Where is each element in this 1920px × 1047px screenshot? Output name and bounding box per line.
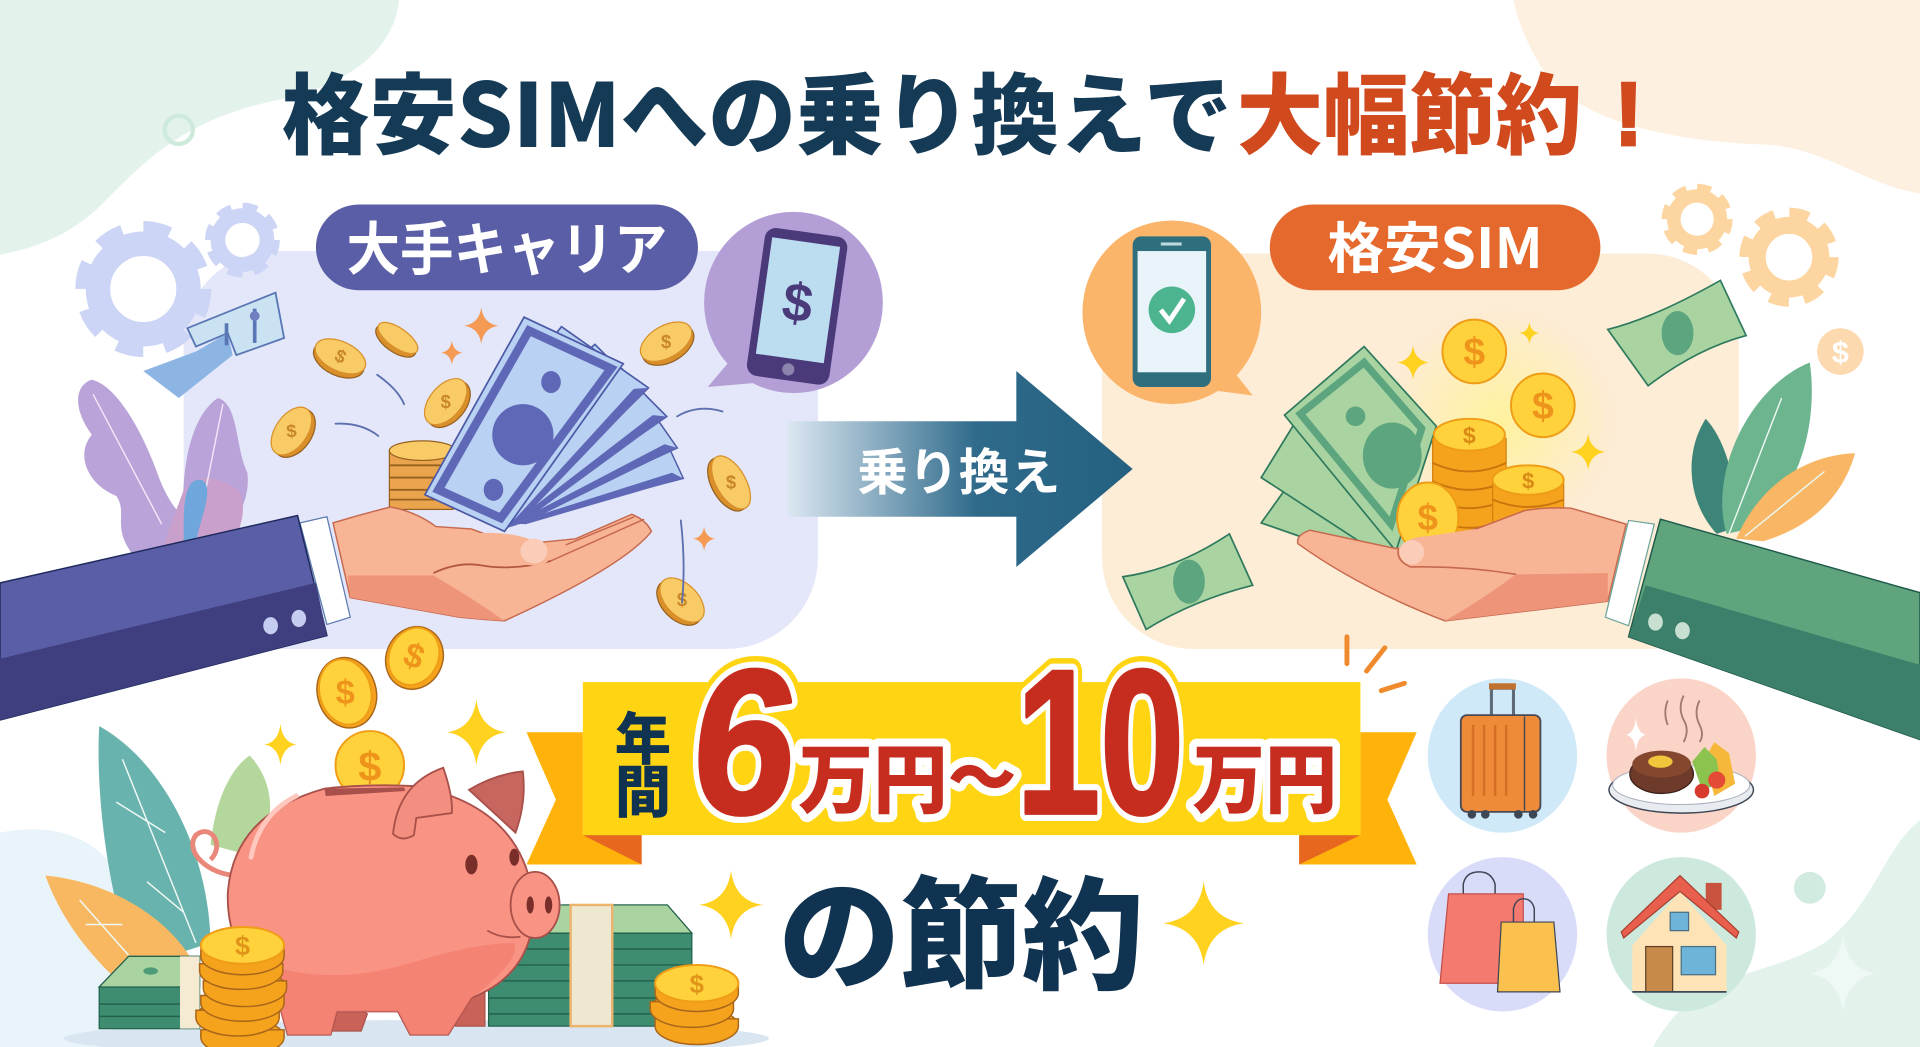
amount outline [684, 626, 1184, 857]
falling coins into piggy bank [309, 617, 453, 735]
far ear [469, 771, 524, 833]
eyes [465, 855, 478, 874]
amount outline: 6 [684, 626, 807, 857]
falling coins left: $ [331, 344, 350, 368]
green bills [1261, 347, 1436, 566]
label pill: major carrier: 大手キャリア [347, 202, 667, 286]
arrow: switch: 乗り換え [857, 433, 1060, 505]
ground shadow [64, 1020, 769, 1047]
icon: house [1607, 857, 1756, 1011]
coin stacks: $ [1418, 497, 1438, 538]
leaves behind piggy [45, 726, 270, 974]
falling coins left: $ [726, 472, 736, 493]
icon: dollar badge right: $ [1832, 335, 1849, 369]
text: per year: 間 [615, 748, 671, 829]
amount text: ～ [948, 722, 1016, 824]
icon: dollar badge right [1817, 328, 1864, 375]
yellow sparkles [1397, 322, 1605, 470]
near ear [393, 768, 452, 839]
panel: budget SIM background [1102, 254, 1739, 649]
budget SIM money [1123, 280, 1746, 629]
icon: gears left [84, 208, 274, 348]
major carrier money [263, 307, 758, 634]
gold coin stack left: $ [235, 931, 250, 961]
flying bill top [1608, 280, 1746, 386]
sparkles near piggy [264, 699, 1244, 965]
amount text [684, 626, 1337, 857]
highlight [251, 796, 296, 857]
tail [193, 832, 239, 876]
icon: flying torn bill left [143, 293, 284, 398]
coin stacks: $ [1522, 469, 1534, 494]
icon: purple leaves [78, 380, 248, 557]
icon: shopping bags [1428, 857, 1577, 1011]
arrow: switch [787, 371, 1133, 567]
body [228, 785, 534, 1035]
title: 大幅節約 [1237, 46, 1582, 173]
amount text: 6 [684, 626, 807, 857]
label pill: budget SIM [1270, 204, 1600, 290]
icon: expensive phone bubble [704, 212, 883, 393]
coin in slot [336, 731, 404, 800]
belly shade [245, 943, 515, 1035]
falling coins into piggy bank: $ [336, 674, 355, 712]
falling coins left: $ [285, 420, 297, 442]
text: per year: 年 [615, 695, 671, 776]
falling coins into piggy bank: $ [398, 635, 429, 677]
amount text: 万円 [1193, 719, 1337, 829]
floating coins: $ [1463, 331, 1485, 374]
cash stack right [489, 905, 692, 1026]
piggy bank [193, 731, 560, 1035]
gold coin stack left [196, 927, 287, 1047]
coin stacks [1397, 419, 1564, 554]
back legs [324, 974, 485, 1031]
falling coins left: $ [441, 391, 451, 412]
snout [511, 872, 560, 938]
title: 格安SIMへの乗り換えで [282, 46, 1232, 173]
icon: gears right [1667, 189, 1832, 300]
text: of savings: の節約 [779, 839, 1144, 1016]
savings ribbon [527, 626, 1417, 865]
gold coin stack right: $ [690, 971, 704, 999]
coin stacks: $ [1463, 422, 1476, 448]
amount white outline: 万円 [1193, 719, 1337, 829]
coin stack left [389, 441, 456, 509]
amount white outline: 6 [684, 626, 807, 857]
amount white outline: ～ [948, 722, 1016, 824]
amount outline: 10 [1016, 627, 1184, 857]
falling coins left: $ [677, 589, 687, 610]
amount white outline: 万円 [798, 719, 948, 829]
amount white outline [684, 626, 1337, 857]
floating coins [1442, 320, 1575, 437]
sparkles and motion lines [336, 307, 722, 602]
falling coins left [263, 314, 758, 634]
hand and sleeve left [0, 507, 651, 720]
amount white outline: 10 [1016, 627, 1184, 857]
icon: expensive phone bubble: $ [779, 271, 817, 335]
icon: leaves right [1692, 362, 1855, 541]
text: per year [615, 695, 671, 829]
glow [1384, 306, 1616, 539]
coin in slot: $ [358, 743, 381, 790]
panel: major carrier background [184, 251, 818, 649]
gold coin stack right [650, 965, 738, 1045]
label pill: budget SIM: 格安SIM [1327, 204, 1543, 284]
icon: suitcase [1428, 678, 1577, 833]
floating coins: $ [1532, 385, 1554, 428]
ribbon band [583, 682, 1360, 835]
burst lines [1347, 637, 1404, 691]
falling coins left: $ [661, 331, 671, 352]
smile [487, 931, 520, 937]
hand and sleeve right [1298, 508, 1920, 740]
amount text: 万円 [798, 719, 948, 829]
slot [324, 787, 405, 796]
fan of bills [425, 310, 708, 586]
icon: steak plate [1607, 678, 1756, 833]
title: ! [1615, 65, 1642, 164]
amount text: 10 [1016, 627, 1184, 857]
ribbon tails [527, 732, 642, 865]
icon: check phone bubble [1082, 220, 1261, 404]
cash stack left [99, 956, 200, 1029]
flying bill bottom [1123, 534, 1253, 629]
